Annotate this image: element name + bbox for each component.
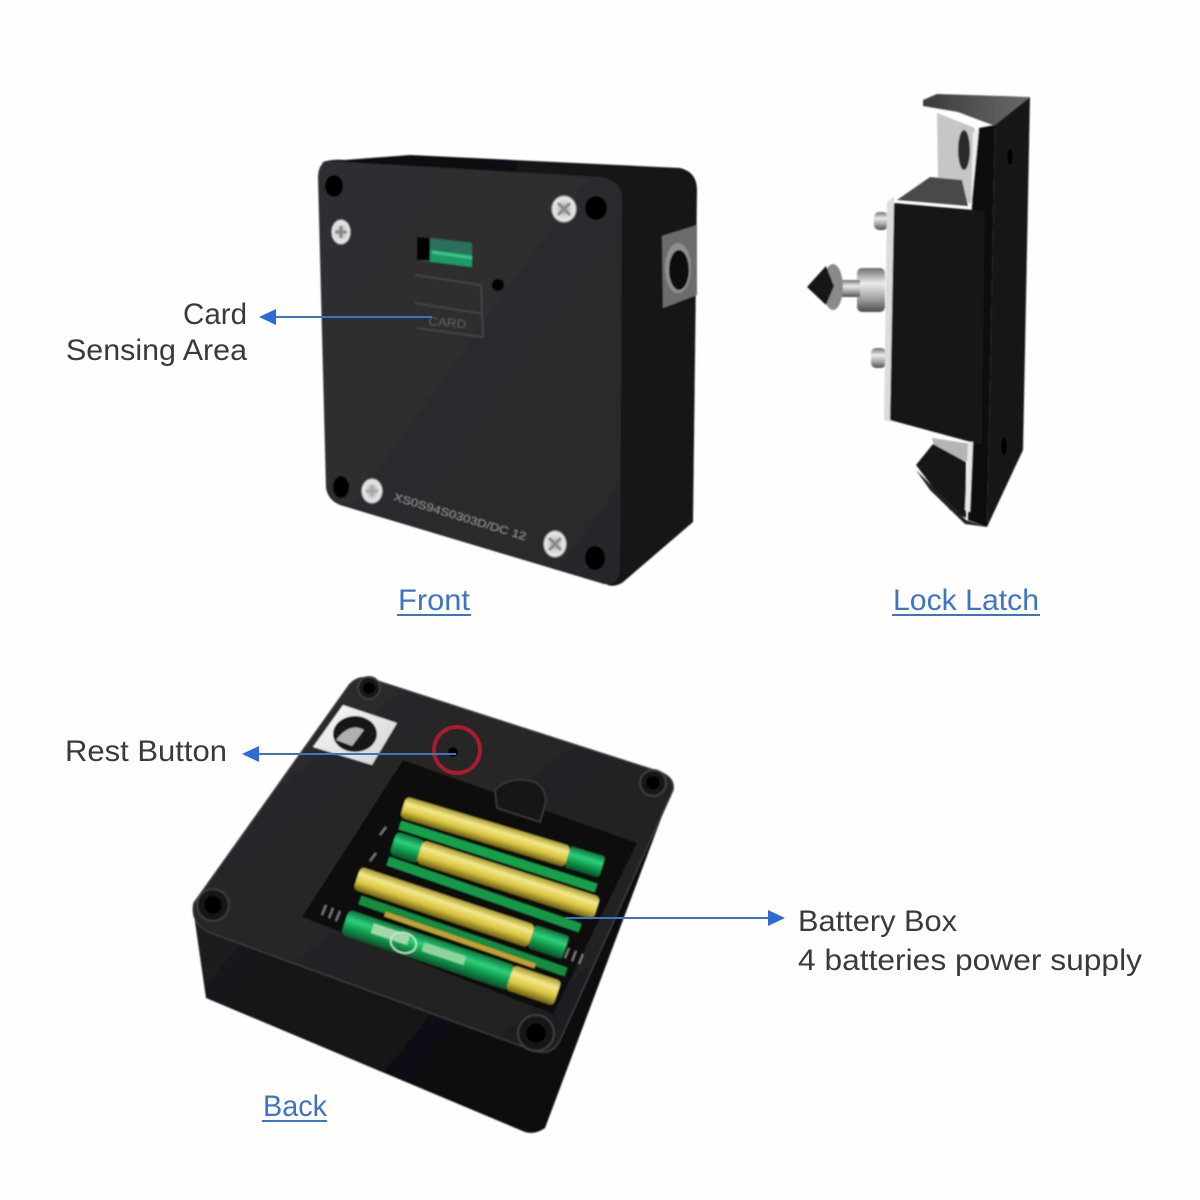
serial number: XS0S94S0303D/DC 12: [392, 491, 528, 543]
caption: back: Back: [263, 1090, 328, 1123]
caption: lock latch: Lock Latch: [893, 584, 1039, 617]
lock body side and top: [322, 155, 697, 586]
top flap: [923, 94, 1030, 126]
side port plate: [662, 225, 697, 308]
top silver plate: [930, 113, 977, 205]
caption: front: Front: [398, 584, 471, 617]
label: card sensing area: Card: [183, 298, 247, 331]
corner holes: [325, 175, 607, 570]
spring: [958, 130, 970, 170]
label: battery box: Battery Box: [798, 905, 957, 938]
battery 3: [353, 867, 569, 959]
product photo: back of lock: [193, 677, 673, 1133]
embossed sensing panel: [415, 275, 483, 337]
label: battery box: 4 batteries power supply: [798, 944, 1142, 977]
battery cavity: [302, 760, 637, 1014]
label: card sensing area: [66, 298, 247, 367]
lock front face: [318, 161, 622, 584]
lower foot: [916, 470, 987, 527]
battery 2: [389, 832, 600, 920]
embossed CARD text: CARD: [428, 314, 467, 331]
lower silver plate: [932, 438, 972, 462]
reset button highlight circle: [434, 727, 480, 773]
small hole: [492, 279, 504, 291]
lock back face: [193, 678, 673, 1052]
lower flap: [916, 444, 966, 518]
silver mounting strip: [884, 197, 894, 422]
lower edge: [965, 442, 973, 512]
spring contacts: [322, 827, 583, 964]
latch bolt: [807, 264, 885, 312]
corner screw holes: [197, 677, 666, 1051]
silver edge: [971, 130, 979, 205]
battery 1: [400, 796, 605, 878]
block top surface: [897, 177, 968, 206]
lock side walls: [193, 785, 673, 1133]
label: card sensing area: Sensing Area: [66, 334, 247, 367]
cavity lid recess: [495, 780, 546, 822]
front column: [968, 125, 995, 527]
arrow: battery box: [565, 910, 785, 926]
reset hole: [448, 747, 458, 757]
screw hole centres: [204, 682, 660, 1043]
green strips between batteries: [360, 825, 596, 972]
arrow: rest button: [242, 746, 456, 762]
label: battery box: [798, 905, 1142, 977]
latch studs: [871, 212, 888, 368]
product photo: front of lock: [318, 155, 697, 586]
arrow: card sensing area: [259, 309, 432, 325]
port plate: [313, 705, 397, 765]
battery 4: [341, 910, 561, 1006]
screws: [331, 195, 577, 558]
main block: [890, 203, 985, 445]
right side face: [987, 97, 1030, 527]
label: rest button: Rest Button: [65, 735, 227, 768]
side slots: [1001, 149, 1013, 455]
product photo: lock latch: [807, 94, 1030, 527]
indicator window: [417, 237, 472, 267]
